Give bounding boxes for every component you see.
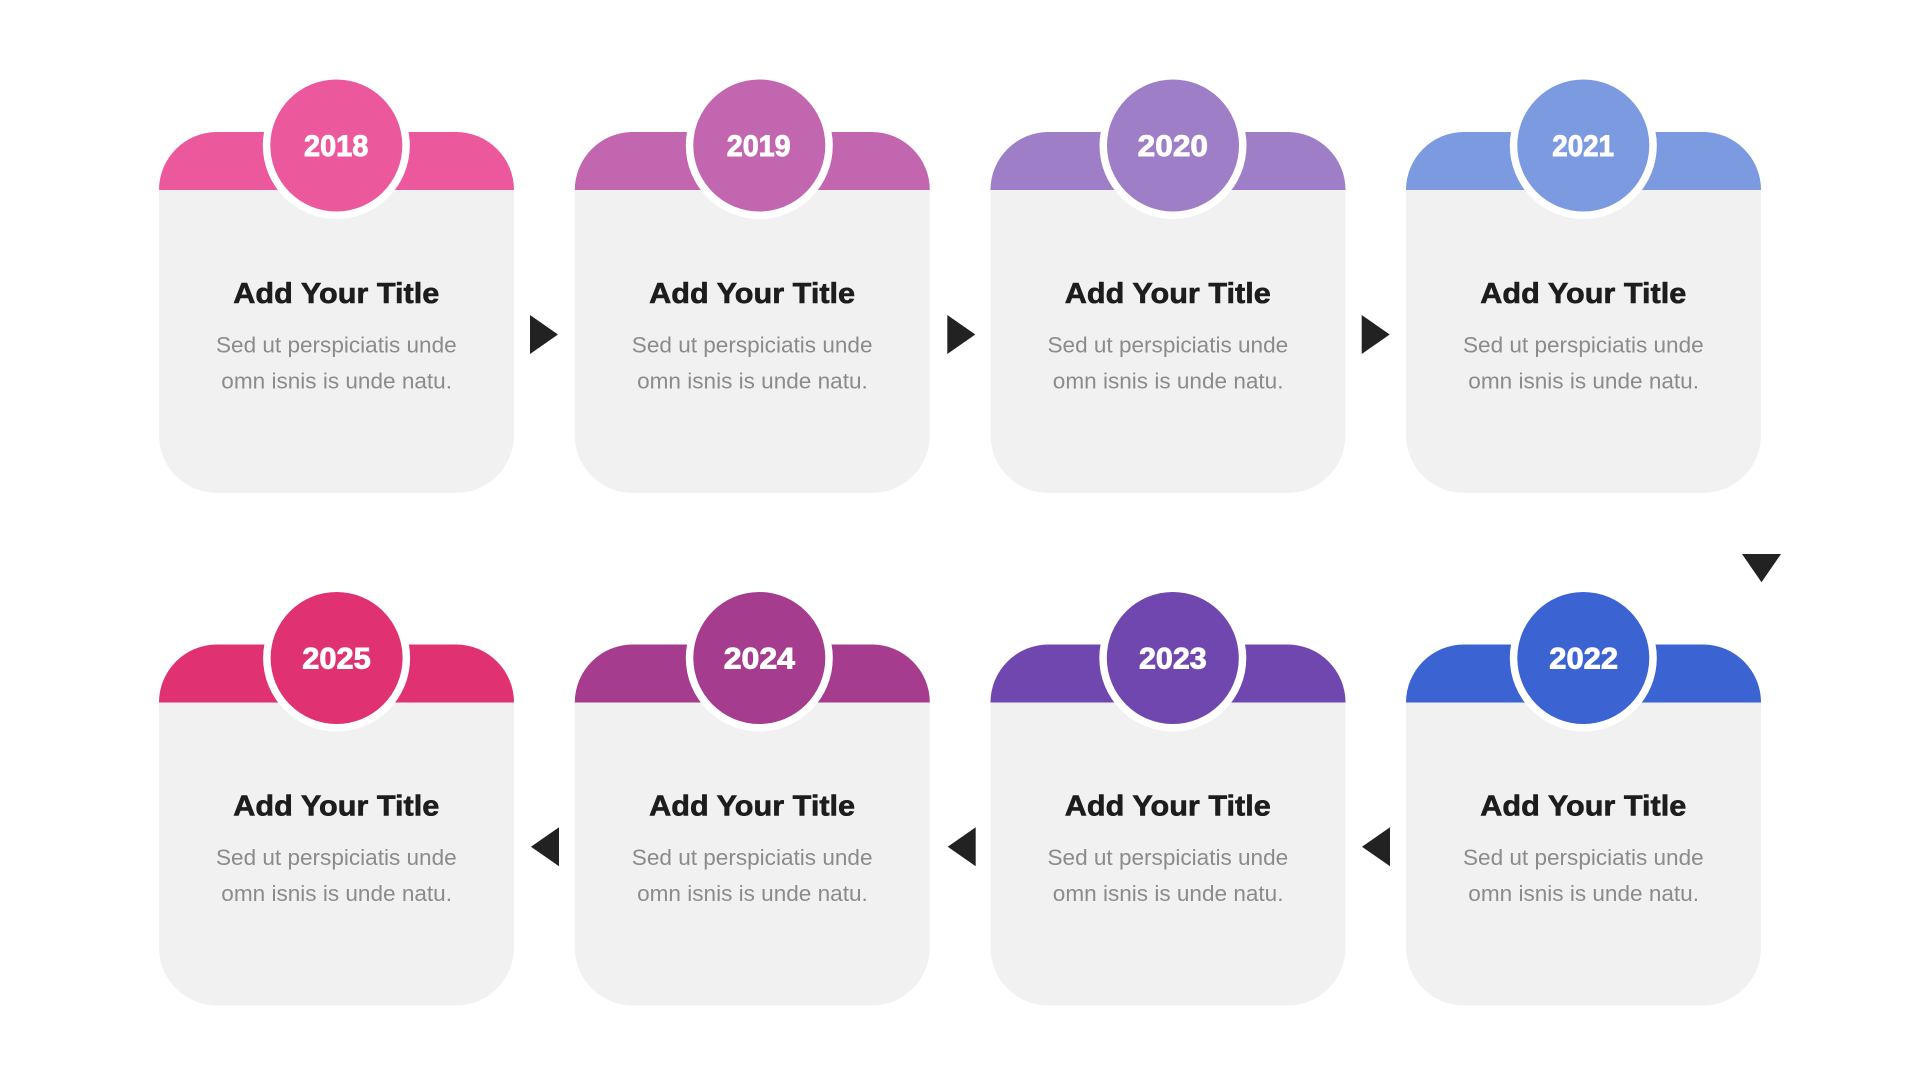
text block: Sed ut perspiciatis unde	[632, 845, 872, 870]
year badge: 2023: 2023	[1139, 642, 1207, 676]
card body	[1406, 702, 1761, 1006]
text block	[1048, 333, 1288, 394]
text block	[1463, 333, 1704, 394]
year badge: 2024	[686, 584, 833, 732]
arrow: 2023 to 2024	[948, 827, 976, 866]
year badge: 2022: 2022	[1549, 642, 1618, 676]
panel: 2025 card	[159, 584, 514, 1006]
card header band	[990, 132, 1346, 190]
text block	[632, 845, 872, 906]
text block: Sed ut perspiciatis unde	[632, 333, 872, 358]
year badge: 2021	[1510, 72, 1657, 219]
year badge: 2020: 2020	[1138, 130, 1208, 163]
text block: omn isnis is unde natu.	[221, 881, 452, 906]
card header band	[1406, 644, 1761, 702]
year badge: 2020	[1100, 72, 1246, 219]
card header band	[990, 644, 1346, 702]
heading: Add Your Title	[649, 790, 855, 822]
card header band	[575, 132, 930, 190]
year badge: 2018: 2018	[304, 130, 368, 163]
card header band	[159, 644, 514, 702]
text block: omn isnis is unde natu.	[637, 881, 868, 906]
card body	[1406, 190, 1761, 493]
text block: omn isnis is unde natu.	[1468, 368, 1699, 394]
text block	[632, 333, 872, 394]
year badge: 2025: 2025	[302, 642, 371, 676]
heading: Add Your Title	[649, 278, 855, 310]
heading: Add Your Title	[1480, 790, 1686, 822]
text block: Sed ut perspiciatis unde	[216, 333, 457, 358]
card body	[159, 702, 514, 1006]
panel: 2018 card	[159, 72, 514, 493]
text block: omn isnis is unde natu.	[221, 368, 452, 394]
heading: Add Your Title	[233, 790, 439, 822]
card header band	[1406, 132, 1761, 190]
card body	[159, 190, 514, 493]
text block	[216, 845, 457, 906]
text block: omn isnis is unde natu.	[1053, 368, 1284, 394]
text block: omn isnis is unde natu.	[1053, 881, 1284, 906]
text block: omn isnis is unde natu.	[637, 368, 868, 394]
panel: 2019 card	[575, 72, 930, 493]
text block: Sed ut perspiciatis unde	[1463, 333, 1704, 358]
year badge: 2022	[1510, 584, 1657, 732]
year badge: 2019	[686, 72, 833, 219]
heading: Add Your Title	[1480, 278, 1686, 310]
year badge: 2024: 2024	[724, 642, 795, 676]
card body	[990, 702, 1346, 1006]
arrow: 2020 to 2021	[1362, 315, 1390, 354]
text block	[1048, 845, 1288, 906]
year badge: 2025	[263, 584, 410, 732]
arrow: 2022 to 2023	[1362, 827, 1390, 866]
year badge: 2019: 2019	[727, 130, 791, 163]
year badge: 2018	[263, 72, 410, 219]
card header band	[159, 132, 514, 190]
year badge: 2023	[1099, 584, 1246, 732]
year badge: 2021: 2021	[1552, 130, 1614, 163]
panel: 2023 card	[990, 584, 1346, 1006]
text block: Sed ut perspiciatis unde	[216, 845, 457, 870]
card body	[575, 190, 930, 493]
card body	[990, 190, 1346, 493]
text block	[216, 333, 457, 394]
heading: Add Your Title	[1065, 790, 1271, 822]
arrow: 2021 down to 2022	[1742, 554, 1781, 582]
card body	[575, 702, 930, 1006]
arrow: 2019 to 2020	[947, 315, 975, 354]
text block: Sed ut perspiciatis unde	[1463, 845, 1704, 870]
text block	[1463, 845, 1704, 906]
panel: 2024 card	[575, 584, 930, 1006]
arrow: 2024 to 2025	[531, 827, 559, 866]
text block: Sed ut perspiciatis unde	[1048, 333, 1288, 358]
text block: Sed ut perspiciatis unde	[1048, 845, 1288, 870]
panel: 2021 card	[1406, 72, 1761, 493]
heading: Add Your Title	[1065, 278, 1271, 310]
card header band	[575, 644, 930, 702]
text block: omn isnis is unde natu.	[1468, 881, 1699, 906]
panel: 2022 card	[1406, 584, 1761, 1006]
arrow: 2018 to 2019	[530, 315, 558, 354]
panel: 2020 card	[990, 72, 1346, 493]
heading: Add Your Title	[233, 278, 439, 310]
